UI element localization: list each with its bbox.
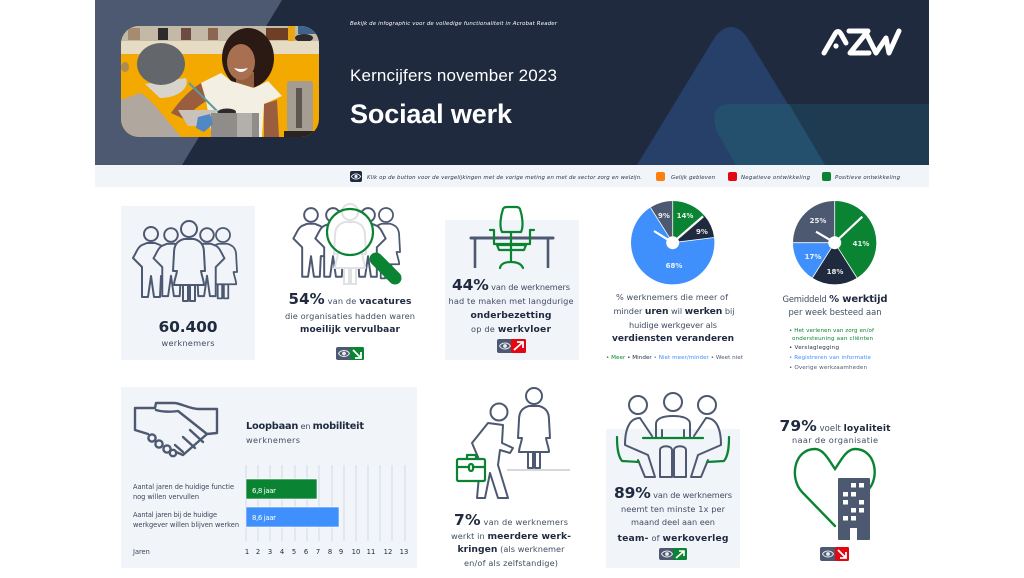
panel: loyaliteit xyxy=(780,417,891,561)
legend: werktijd: ondersteuning aan cliënten xyxy=(792,336,873,342)
chart: uren pie: 9% xyxy=(658,212,670,220)
panel: meerdere werkkringen xyxy=(451,388,571,568)
bar chart: 10 xyxy=(352,548,360,556)
panel: werkoverleg: neemt ten minste 1x per xyxy=(621,504,726,514)
text: werktijd: per week besteed aan xyxy=(788,307,882,317)
text: werktijd: Gemiddeld % werktijd xyxy=(782,294,888,305)
text: 79% voelt loyaliteit xyxy=(780,417,891,435)
panel: werknemers xyxy=(121,206,255,360)
panel: loyaliteit: naar de organisatie xyxy=(792,435,878,445)
chart: werktijd pie: 17% xyxy=(805,253,821,261)
bar chart: 1 xyxy=(245,548,249,556)
bowl and pot xyxy=(178,110,218,126)
bar chart: werkgever willen blijven werken xyxy=(133,521,239,529)
text: 54% van de vacatures xyxy=(288,290,412,308)
chart: uren pie xyxy=(631,201,714,284)
bar chart: 6 xyxy=(304,548,308,556)
legend: red xyxy=(728,172,811,181)
legend band xyxy=(95,165,929,187)
panel: loopbaan en mobiliteit xyxy=(121,387,417,568)
bar chart: nog willen vervullen xyxy=(133,493,199,501)
panel: werkoverleg: maand deel aan een xyxy=(631,517,715,527)
panel: onderbezetting xyxy=(445,207,579,360)
badge xyxy=(659,548,687,560)
text: uren xyxy=(612,292,734,344)
legend: green: Positieve ontwikkeling xyxy=(835,175,901,181)
bar chart: 6,8 jaar xyxy=(252,487,276,495)
text: 44% van de werknemers xyxy=(452,276,570,294)
info text: Bekijk de infographic voor de volledige functionaliteit in Acrobat Reader xyxy=(350,21,558,27)
chart: werktijd pie: 18% xyxy=(827,268,843,276)
icon: people with magnifier xyxy=(293,204,400,284)
icon: eye button xyxy=(350,171,362,182)
panel: werkoverleg xyxy=(606,393,740,568)
panel: vacatures: die organisaties hadden waren xyxy=(285,311,415,321)
bar chart: Jaren xyxy=(132,548,150,556)
icon: handshake xyxy=(135,403,217,456)
panel: loopbaan en mobiliteit: werknemers xyxy=(246,435,300,445)
panel: onderbezetting: onderbezetting xyxy=(470,310,552,321)
bar chart: 2 xyxy=(256,548,260,556)
icon: group of people xyxy=(133,221,237,301)
icon: team meeting xyxy=(617,393,729,477)
urn xyxy=(287,81,313,131)
chart: uren pie: 14% xyxy=(677,212,693,220)
legend: werktijd: • Verslaglegging xyxy=(789,345,839,351)
badge xyxy=(820,547,849,561)
header banner xyxy=(95,0,929,165)
chart: werktijd pie: 25% xyxy=(810,217,826,225)
panel: vacatures xyxy=(285,204,415,360)
woman xyxy=(222,28,274,88)
bar chart: 9 xyxy=(339,548,343,556)
legend: werktijd: • Het verlenen van zorg en/of xyxy=(789,328,875,334)
panel: vacatures: moeilijk vervulbaar xyxy=(300,325,401,335)
panel: werkoverleg: team- of werkoverleg xyxy=(618,533,728,544)
chart: uren pie: 9% xyxy=(696,228,708,236)
text: 89% van de werknemers xyxy=(614,484,732,502)
legend note: Klik op de button voor de vergelijkingen met de vorige meting en met de sector zorg en welzijn. xyxy=(367,175,642,181)
icon: heart with building xyxy=(795,449,875,540)
badge xyxy=(497,339,526,353)
chart: uren pie: 68% xyxy=(666,262,682,270)
panel: meerdere werkkringen: kringen (als werknemer xyxy=(458,544,565,555)
bar chart: 11 xyxy=(367,548,375,556)
badge xyxy=(336,347,364,360)
decorative triangle xyxy=(637,27,788,165)
legend: werktijd: • Overige werkzaamheden xyxy=(789,365,867,371)
legend: orange xyxy=(656,172,716,181)
heading: Loopbaan en mobiliteit xyxy=(246,421,364,432)
bar chart: Aantal jaren bij de huidige xyxy=(133,511,217,519)
subtitle: Kerncijfers november 2023 xyxy=(350,66,557,85)
bar chart: 4 xyxy=(280,548,284,556)
title: Sociaal werk xyxy=(350,99,513,129)
bar chart: 7 xyxy=(316,548,320,556)
bar chart: 13 xyxy=(400,548,408,556)
number: 60.400 xyxy=(158,318,218,336)
bar chart: 5 xyxy=(292,548,296,556)
legend: werktijd xyxy=(789,328,875,371)
icon: desk and chair xyxy=(471,207,553,268)
panel: onderbezetting: op de werkvloer xyxy=(471,324,551,335)
text: uren: % werknemers die meer of xyxy=(616,292,729,302)
legend: red: Negatieve ontwikkeling xyxy=(741,175,811,181)
logo AZW xyxy=(824,31,899,53)
legend: uren: • Meer • Minder • Niet meer/minder • Weet niet xyxy=(606,355,744,361)
legend: orange: Gelijk gebleven xyxy=(671,175,716,181)
photo: volunteer serving soup xyxy=(121,26,319,137)
ladle xyxy=(189,83,219,113)
bar chart: 8,6 jaar xyxy=(252,514,276,522)
bar chart xyxy=(132,465,408,556)
icon: walking man, woman and briefcase xyxy=(457,388,570,498)
panel: meerdere werkkringen: en/of als zelfstandige) xyxy=(464,558,558,568)
panel: meerdere werkkringen: werkt in meerdere werk- xyxy=(451,531,571,542)
text: uren: verdiensten veranderen xyxy=(612,334,734,344)
text: uren: huidige werkgever als xyxy=(629,320,717,330)
panel: onderbezetting: had te maken met langdurige xyxy=(448,296,574,306)
text: uren: minder uren wil werken bij xyxy=(614,306,734,317)
man xyxy=(121,93,181,137)
legend: green xyxy=(822,172,901,181)
label: werknemers xyxy=(162,338,214,348)
chart: werktijd pie: 41% xyxy=(853,240,869,248)
bar chart: Aantal jaren de huidige functie xyxy=(133,483,234,491)
chart: werktijd pie xyxy=(793,201,876,284)
bar chart: 12 xyxy=(384,548,392,556)
bar chart: 8 xyxy=(328,548,332,556)
text: werktijd xyxy=(782,294,888,317)
text: 7% van de werknemers xyxy=(454,511,568,529)
bar chart: 3 xyxy=(268,548,272,556)
legend: werktijd: • Registreren van informatie xyxy=(789,355,872,361)
